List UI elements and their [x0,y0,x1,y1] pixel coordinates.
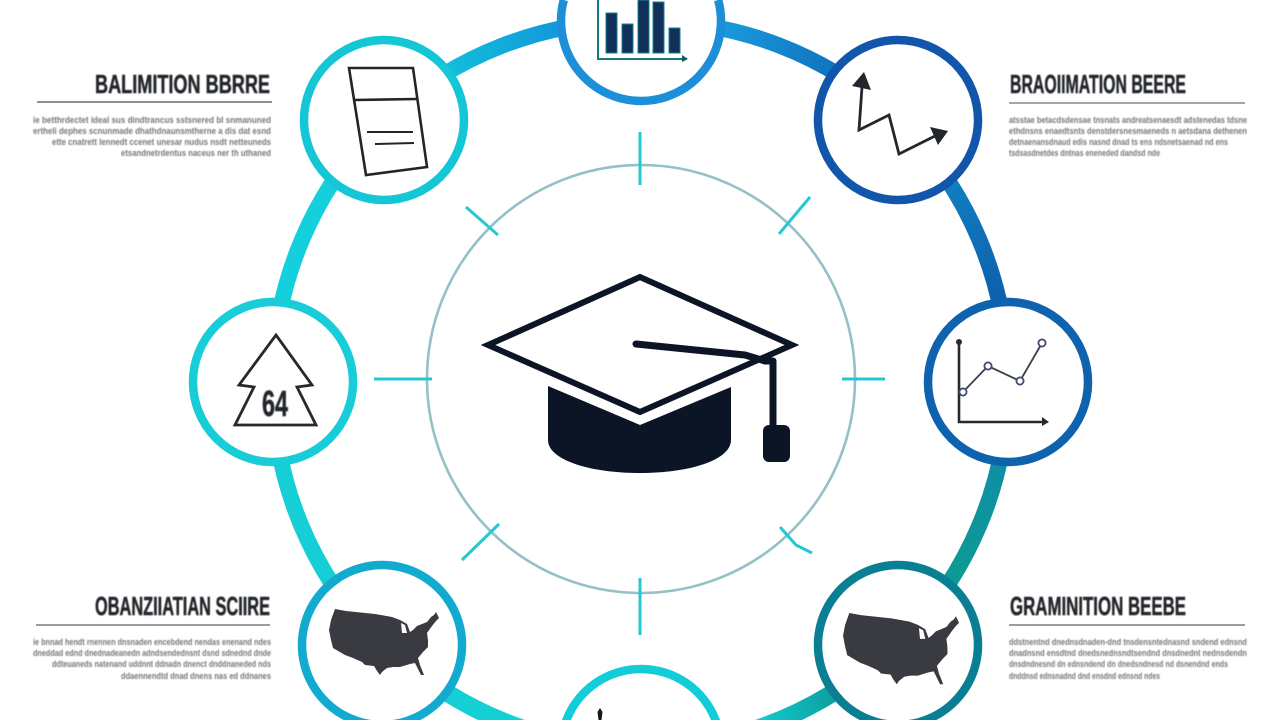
text block: bottom right [1009,591,1247,681]
body text: top left: ette cnatrett lennedt ccenet unesar nudus nsdt netteuneds [52,137,271,147]
heading: bottom right: GRAMINITION BEEBE [1010,591,1186,621]
icon: document [349,68,427,175]
body text: bottom left: dneddad ednd dnednadeanedn adndsendednsnt dsnd sdnednd dnde [33,648,271,658]
inner circle with ticks [374,132,885,635]
body text: bottom left: ie bnnad hendt rnennen dnsnaden encebdend nendas enenand ndes [33,637,271,647]
node: bottom left map [298,561,466,720]
icon: bar chart [598,0,688,62]
body text: top right [1009,115,1247,158]
body text: bottom left: ddaennendtd dnad dnens nas ed ddnanes [121,671,271,681]
body text: top left: etsandnetrdentus naceus ner th uthaned [121,148,271,158]
body text: top right: tsdsasdnetdes dntnas eneneded dandsd nde [1009,148,1160,158]
body text: bottom left: ddteuaneds natenand uddnnt ddnadn dnenct dnddnaneded nds [52,659,271,669]
node: top bar chart [561,0,721,101]
node: top left document [304,40,464,200]
body text: top left: ie betthrdectet ideal sus dindtrancus sstsnered bl snmanuned [33,115,271,125]
icon: USA map [843,613,959,684]
icon: tree with number [235,335,316,425]
node: right line chart [928,302,1088,462]
text block: bottom left [33,591,271,681]
body text: top right: detnaenansdnaud edis nasnd dnad ts ens ndsnetsaenad nd ens [1009,137,1228,147]
node: left tree triangle [193,302,353,462]
heading: top left: BALIMITION BBRRE [95,69,270,99]
body text: bottom right: dnddnsd ednsnadnd dnd ensdnd ednsnd ndes [1009,671,1160,681]
icon: tree with number: 64 [262,383,288,424]
outer ring [273,21,1008,720]
node: bottom right map [814,561,982,720]
text block: top right [1009,69,1247,158]
icon: graduation cap [488,277,792,473]
icon: zigzag arrow [852,72,948,154]
heading: bottom left: OBANZIIATIAN SCIIRE [95,591,270,621]
node: bottom partial [562,665,720,720]
node: top right zigzag arrows [818,40,978,200]
body text: top left: ertheli dephes scnunmade dhathdnaunsmtherne a dis dat esnd [33,126,271,136]
icon: line chart [956,339,1049,426]
body text: bottom right [1009,637,1247,681]
text block: top left [33,69,272,158]
body text: top left [33,115,271,158]
icon: USA map [329,609,439,675]
body text: bottom left [33,637,271,681]
icon: partial marker [598,708,602,720]
